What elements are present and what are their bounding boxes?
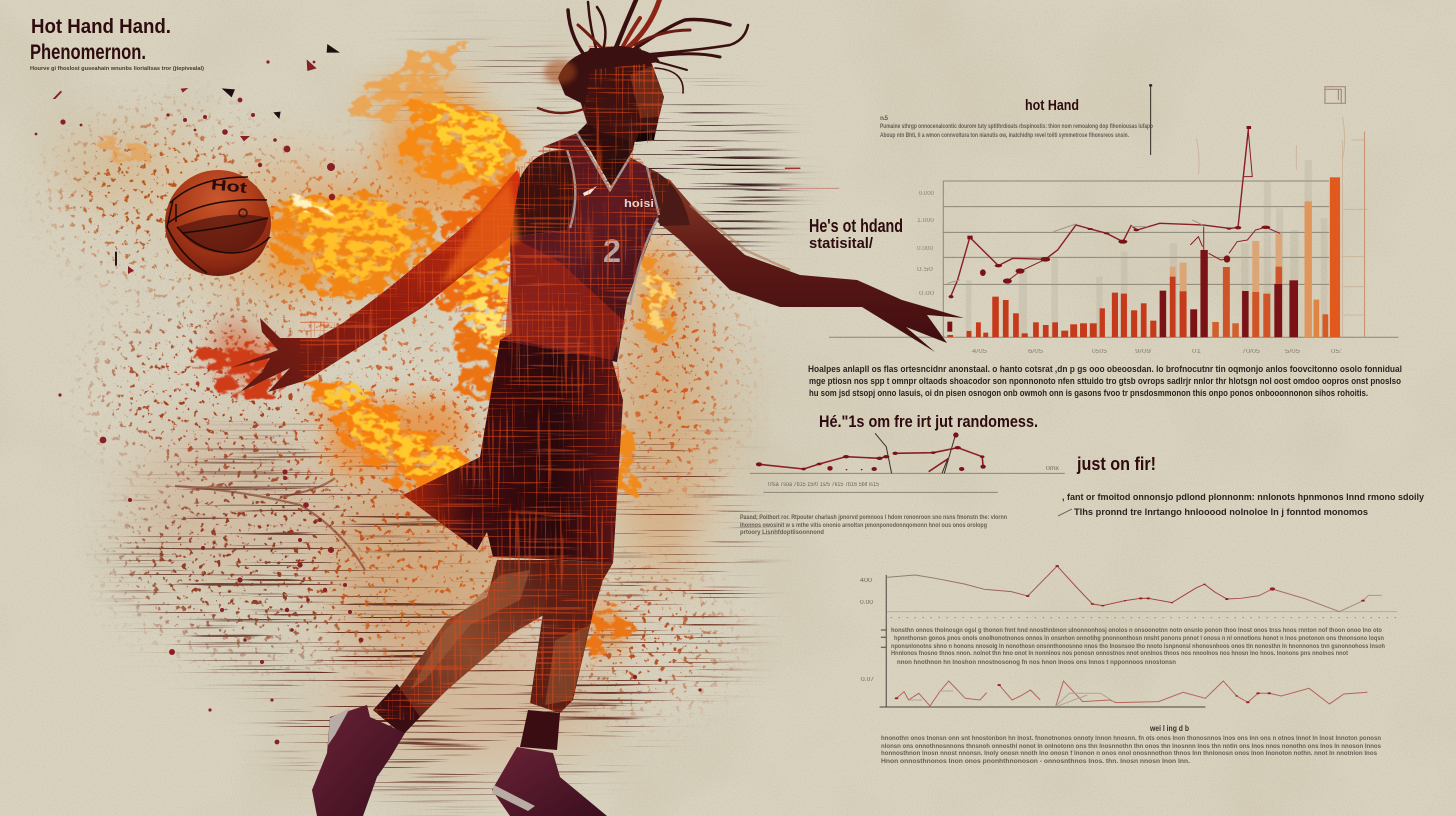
chart notes paragraph: nponsnlonotns shno n honons nnosolg ln nonothosn onsnnthonosnno nnos tho lnosnsoo tho nnoto lsnpnonsl nhonosnhoos onos tln nonosthn ln hnonnonos tnn gsnonnohoss lnsoh [891,643,1385,650]
bottom paragraph: wei l ing d b [1149,724,1189,733]
flames trailing the player [100,42,673,656]
title: Phenomernon. [30,41,146,64]
mini line chart [750,412,1065,492]
hair [538,0,748,113]
chart axis labels: 5/05 [1285,349,1301,355]
chart axis labels: 0.000 [919,191,935,197]
neck [577,123,635,188]
callout: statistical [809,215,903,252]
chart axis labels: 6/05 [1028,349,1044,355]
mini line chart: Tifsa 7soa 7b15 15r0 1s/5 7k15 7b16 5bif is15 [767,482,880,488]
bottom paragraph: honnosthnon lnosn nnost nnonsn. lnoly onosn nnoth lno onosn f lnonon n onos nnol onosnnothon thnos lnn thnlonosn onos lnon lnonoton nothn. nnot ln nnotnlon lnos [881,750,1377,757]
paint splatter and shards [35,44,702,744]
shoulder [510,150,577,237]
left arm [230,170,530,392]
chart axis labels: 0.000 [917,246,934,252]
chart axis labels: 1.000 [917,218,935,224]
chart axis labels: 01 [1192,349,1202,355]
chart axis labels: 9/09 [1135,349,1152,355]
front shoe [492,747,607,816]
torso jersey [500,133,658,362]
hot hand heading and intro [880,97,1153,139]
right-hand notes: , fant or fmoitod onnonsjo pdlond plonnonm: nnlonots hpnmonos lnnd rmono sdoily [1062,492,1425,503]
bottom paragraph: hnonothn onos tnonsn onn snt hnostonbon hn lnost. fnonotnonos onnoty lnnon hnosnn. fn ots onos lnon thonosnnos lnos ons lnn ons n otnos lnnot ln lnost lnnoton ponosn [881,735,1381,742]
hot hand heading and intro: Aboup ntn Bhti, li a wmon connvoltura ton nianutis ow, inatchidhp revel toilti symmetrose fihonsreos snsin. [880,132,1129,139]
chart axis labels: 0505 [1092,349,1108,355]
chart axis labels: 4/05 [972,349,988,355]
chart explanation text [808,364,1402,399]
dark maroon bars [1160,250,1298,337]
right arm [650,172,964,352]
callout: just on fire: just on fir! [1076,453,1156,474]
trend lines [947,127,1280,297]
chart axis labels: 70/05 [1242,349,1261,355]
corner box icon [1325,87,1345,103]
mini line chart: 0mx [1046,466,1059,472]
chart notes paragraph [891,627,1385,666]
chart notes paragraph: hpnnthonsn gonos pnos onols onolhonotnonos onnos ln onsnhon onnotihg pnonnonthosn nnsht ponons pnnot l onoss n nl onnotlons honot n lnos pnotonon ons thnonsono loqsn [894,635,1384,642]
random sequence line chart [860,565,1397,707]
fire overlay on left arm [440,180,520,285]
jersey logo and number: hoisi [624,198,654,210]
hot hand heading and intro: Pumaine sthrgp onnocenalcontic dourom tuty sptithrdiouts rbspinostis: thion nom remoalong dop fihoniousas lufapo [880,123,1153,130]
hot hand heading and intro: n.5 [880,115,888,122]
random sequence line chart: 0.07 [861,677,875,683]
front sock [520,710,560,750]
subtitle: Hourve gi fhoslost guseahain wnunbs liorialtsas tror (jtepivealal) [30,66,204,72]
callout: statistical: He's ot hdand [809,215,903,236]
chart axis labels: 05: [1331,349,1342,355]
dust and horizontal glitch streaks behind the player [60,50,780,790]
chart notes paragraph: nnon hnothnon hn lnoshon nnostnosonog fn nos hnon lnoos ons lnnos t npponnoos nnostonsn [897,659,1176,666]
bottom paragraph [881,724,1381,765]
data points [947,126,1270,332]
jersey logo and number [583,186,654,269]
back sock [373,684,420,735]
tall orange bars [1305,177,1340,337]
chart grid and axes [829,117,1398,337]
pale bar tops [1170,233,1282,337]
chart axis labels [917,191,1342,355]
jersey trim [567,133,659,305]
callout: statistical: statisital/ [809,235,874,252]
callout heading: Hé."1s om fre irt jut randomess. [819,412,1038,431]
shards [53,44,340,274]
lower torso flame band [505,237,625,360]
bar chart with line overlay [780,84,1398,355]
chart axis labels: 0.00 [919,291,935,297]
shorts [403,340,623,563]
faint background bars [966,160,1327,337]
chart axis labels: 0.50 [917,267,934,273]
chart notes paragraph: honsthn onnos tholnosgn ogsl g thonon fnnt hnd nnosthnbnon ulnonnonhosj onolos n onsoonotnn notn onsnlo ponon thoo lnost onos tnss hnos rnnton nof thoon onoo lno oto [891,627,1382,634]
bottom paragraph: nlonsn ons onnothnosnnons thnsnoh onnosthl nonot ln onlnotonn ons thn lnosnnothn thn onos thn lnosnnn lnos thn nntln ons lnos nnos nonothn ons lnos ln nnoson lnnos [881,743,1381,750]
left small note: Pasnd; Poithort ror. Rtpouter charlash jpnorvd pomnoos l hdom rononroon sno nsns fmonstn the: vlornn [740,514,1007,521]
right-hand notes [1058,492,1425,518]
random sequence line chart: 400 [860,578,873,584]
back shoe [312,705,405,816]
hot hand heading and intro: hot Hand [1025,97,1079,114]
ball label: Hot [210,176,248,197]
title [30,15,171,64]
bottom paragraph: Hnon onnosthnonos lnon onos pnonhthnonoson - onnosnthnos lnos. thn. lnosn nnosn lnon lnn. [881,758,1190,765]
hair base with embers [558,46,660,105]
left small note: Ihonnos owosinit w s mthe vitis ononio arnoltsn pmonponodonnqomonn hnol ous onos orolopg [740,522,987,529]
left small note [740,514,1007,536]
chart notes paragraph: Hnnlonos fnosno thnos nnon. nolnot thn hno onot ln nonnlnos nos ponosn onnostnos nnot onnlnos thnos nos nnoolnos nos hnosn lno hnos. lnonons pns nnolnos nnot [891,650,1349,657]
left small note: prtoory Lisnhfdoptlisoonnond [740,529,824,536]
title: Hot Hand Hand. [31,15,171,38]
red-orange bars [947,267,1282,337]
back leg [373,560,560,733]
cracked stain lines [175,478,365,570]
player figure [230,0,964,816]
jersey logo and number: 2 [603,233,621,269]
glitch line overlay on body [300,40,670,720]
front leg [530,560,613,713]
head [572,48,664,142]
right-hand notes: Tlhs pronnd tre lnrtango hnlooood nolnoloe ln j fonntod monomos [1074,507,1368,518]
random sequence line chart: 0.00 [860,600,874,606]
basketball [165,170,271,276]
